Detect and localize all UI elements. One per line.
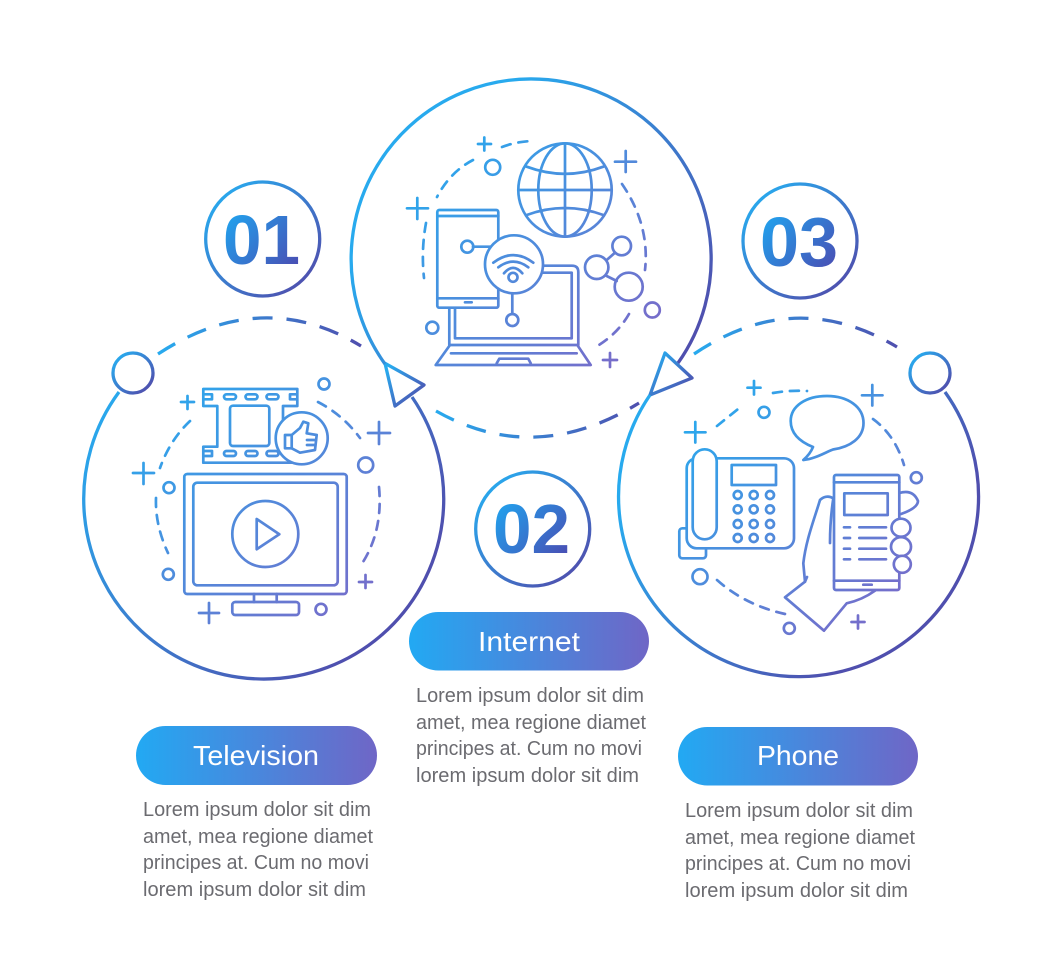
dashed arc: phone [694,318,897,354]
text block: internet: amet, mea regione diamet [416,712,646,734]
text block: internet: lorem ipsum dolor sit dim [416,765,639,787]
number badge 03: 03 [760,203,838,281]
number badge 03 [743,184,857,298]
film strip [203,389,297,463]
panel: phone [619,318,979,677]
icon: phones and speech bubble [679,381,922,634]
text block: phone [685,800,915,902]
globe [518,143,612,237]
thumbs up badge [276,412,328,464]
node circle: phone [910,353,950,393]
text block: television: principes at. Cum no movi [143,852,369,874]
heading pill: television: Television [193,740,319,771]
laptop [436,266,591,365]
text block: phone: principes at. Cum no movi [685,853,911,875]
icon: internet devices [407,138,660,367]
text block: phone: lorem ipsum dolor sit dim [685,880,908,902]
arrow: phone to internet [650,353,692,395]
number badge 01: 01 [223,201,300,279]
dashed orbit: phone icon [717,391,904,614]
ring: television circle [84,392,444,679]
number badge 01 [206,182,320,296]
number badge 02: 02 [493,490,570,568]
desk phone [679,449,794,558]
speech bubble [791,396,864,460]
text block: internet: Lorem ipsum dolor sit dim [416,685,644,707]
icon: television and film [133,378,390,623]
hand holding phone [785,492,918,631]
dashed orbit: television icon [156,402,380,562]
sparkles: television icon [133,396,390,623]
dots: internet icon [426,160,660,334]
sparkles: phone icon [685,381,882,628]
share nodes [585,237,643,301]
heading pill: television [136,726,377,785]
panel: television [84,318,444,679]
dots: television icon [163,378,373,615]
mobile phone [834,475,899,590]
dots: phone icon [692,407,922,634]
heading pill: internet [409,612,649,670]
dashed arc: television [158,318,361,354]
ring: internet circle [351,79,711,364]
panel: internet [351,79,711,437]
text block: television: Lorem ipsum dolor sit dim [143,799,371,821]
arrow: internet to television [385,363,424,406]
text block: television: amet, mea regione diamet [143,826,373,848]
text block: internet [416,685,646,787]
television screen [184,474,347,615]
heading pill: phone: Phone [757,740,839,771]
ring: phone circle [619,392,979,677]
number badge 02 [476,472,590,586]
fingers [891,519,911,573]
sparkles: internet icon [407,138,636,367]
wifi badge [461,235,543,326]
text block: phone: Lorem ipsum dolor sit dim [685,800,913,822]
tablet [437,210,498,308]
dashed arc: internet [436,403,639,437]
heading pill: internet: Internet [478,626,580,657]
node circle: television [113,353,153,393]
text block: internet: principes at. Cum no movi [416,738,642,760]
dashed orbit: internet icon [423,141,646,348]
text block: television: lorem ipsum dolor sit dim [143,879,366,901]
text block: phone: amet, mea regione diamet [685,827,915,849]
heading pill: phone [678,727,918,786]
text block: television [143,799,373,901]
